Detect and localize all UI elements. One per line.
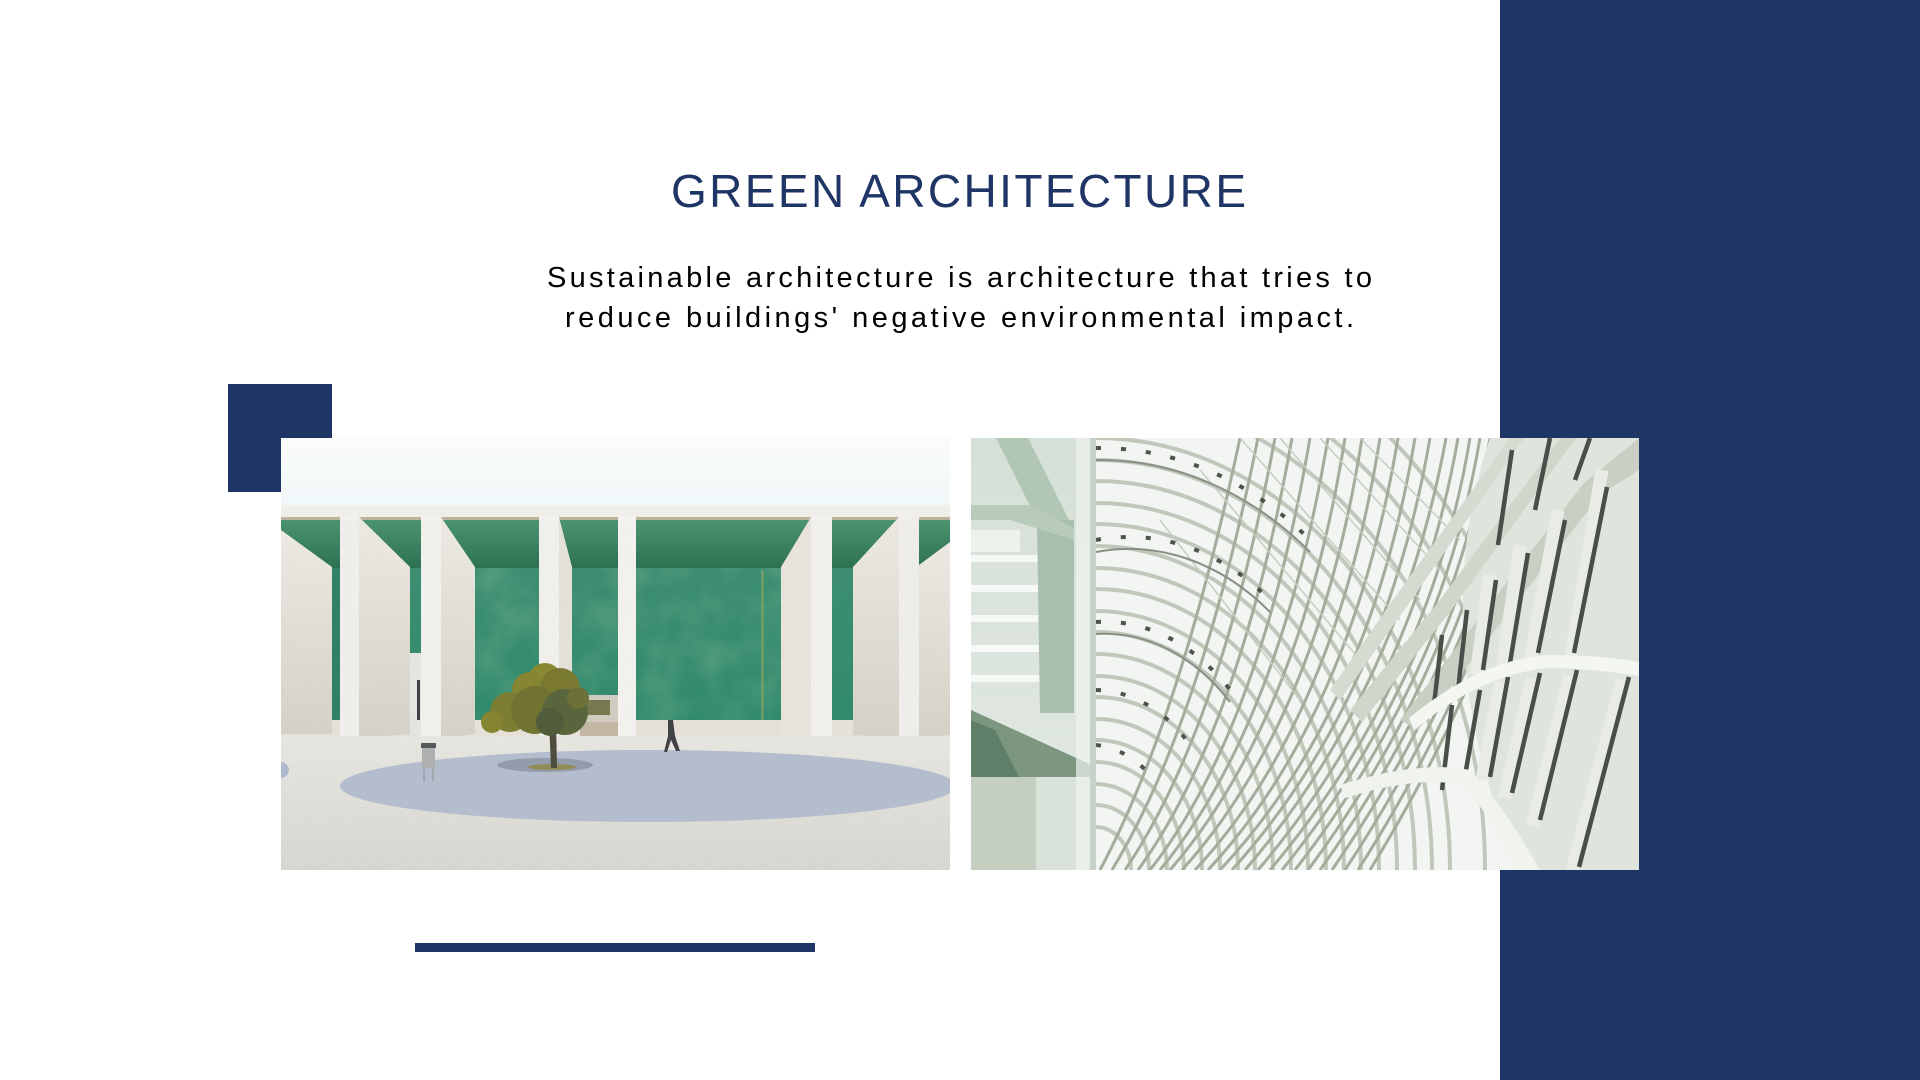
vault arcs xyxy=(1096,438,1487,870)
description text xyxy=(547,262,1372,334)
title: GREEN ARCHITECTURE xyxy=(671,165,1246,217)
corner accent shape xyxy=(228,384,332,492)
description text: Sustainable architecture is architecture that tries to xyxy=(547,262,1372,294)
bin xyxy=(421,743,436,782)
paved circle xyxy=(340,750,956,822)
right wall fins xyxy=(1330,438,1639,870)
person xyxy=(664,720,680,752)
description text: reduce buildings' negative environmental impact. xyxy=(565,302,1354,334)
tree xyxy=(481,663,589,768)
vault ribs xyxy=(1098,438,1490,870)
navy side panel xyxy=(1500,0,1920,1080)
photo: green building with tree xyxy=(271,438,956,870)
accent bar xyxy=(415,943,815,952)
left glass strip xyxy=(971,438,1096,870)
photo: glass vault ceiling xyxy=(971,438,1639,870)
dark glazing bands xyxy=(1096,448,1310,775)
cross bracing xyxy=(1160,438,1460,700)
